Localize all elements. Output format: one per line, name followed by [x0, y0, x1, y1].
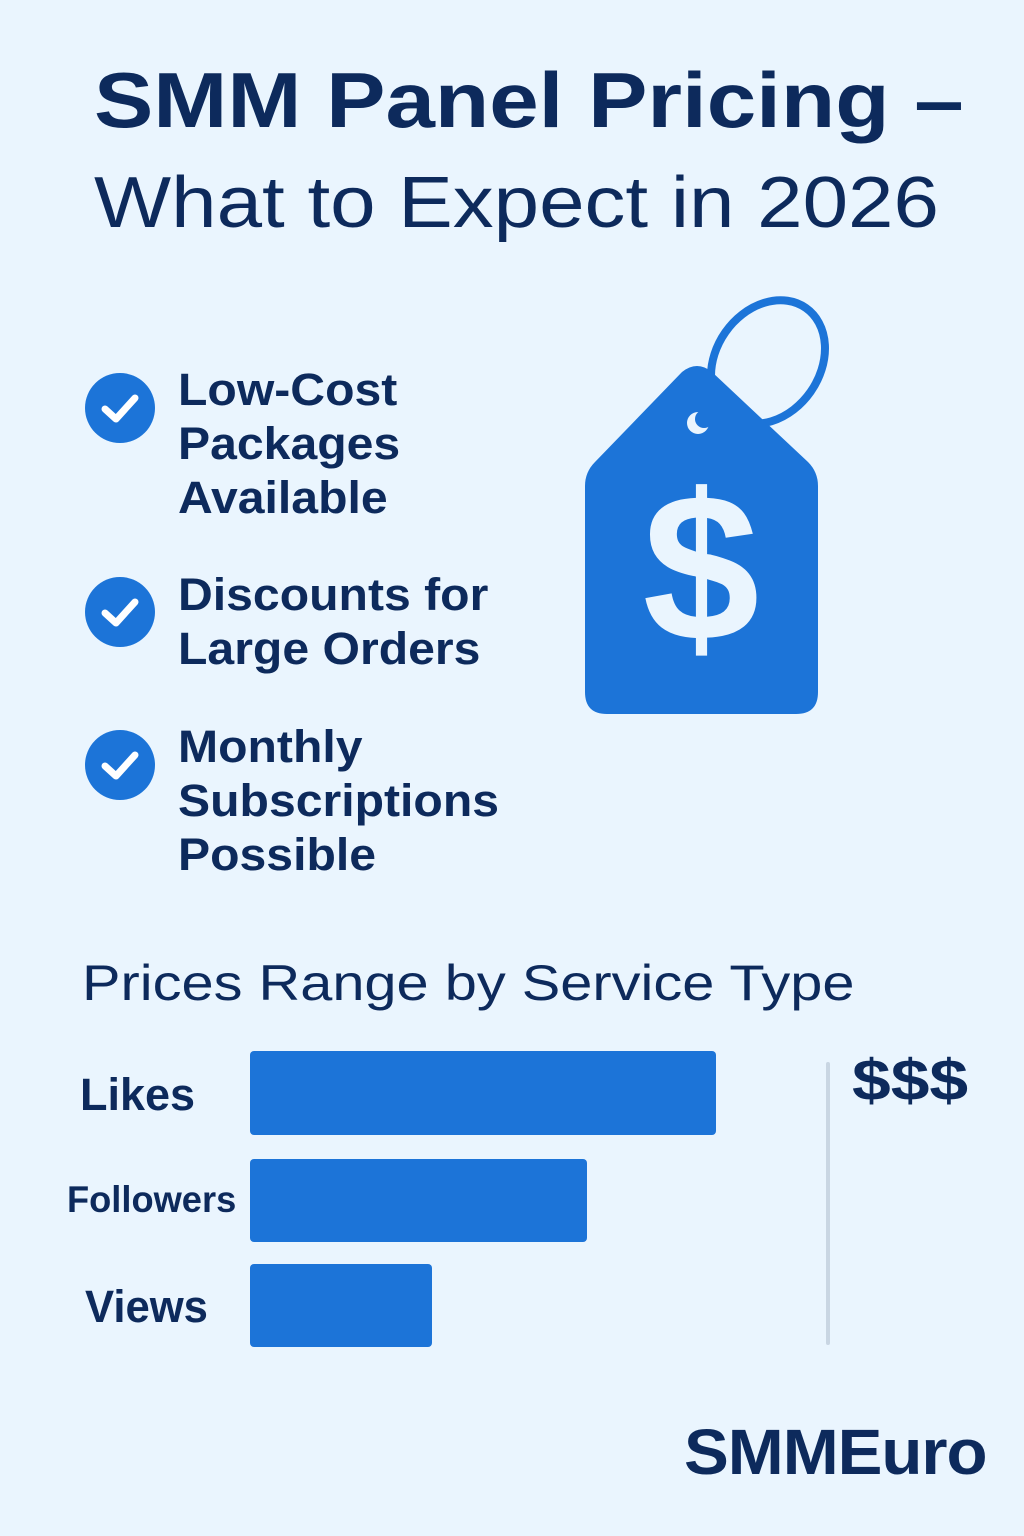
check item 1: Available: [178, 472, 388, 523]
check item 1: Packages: [178, 418, 400, 469]
title: [94, 56, 964, 243]
checklist: [85, 364, 499, 880]
check item 2: Discounts for: [178, 569, 488, 620]
section heading: Prices Range by Service Type: [82, 955, 855, 1011]
label: Views: Views: [85, 1281, 208, 1332]
bar: Views: [250, 1264, 432, 1347]
check item 3: Subscriptions: [178, 775, 499, 826]
bar: Likes: [250, 1051, 716, 1135]
brand: SMMEuro: SMMEuro: [684, 1416, 986, 1488]
check item 3: Possible: [178, 829, 376, 880]
icon: price tag: $: [643, 450, 759, 685]
bar: Followers: [250, 1159, 587, 1242]
title: SMM Panel Pricing –: [94, 56, 964, 144]
axis line: [826, 1062, 830, 1345]
check item 1: Low-Cost: [178, 364, 397, 415]
check item 3: [85, 721, 499, 880]
label: $$$: $$$: [852, 1048, 968, 1113]
check item 3: Monthly: [178, 721, 363, 772]
bar chart: [67, 1048, 968, 1347]
check item 1: [85, 364, 400, 523]
label: Followers: Followers: [67, 1179, 236, 1220]
check item 2: [85, 569, 488, 674]
label: Likes: Likes: [80, 1069, 195, 1120]
icon: price tag: [585, 296, 829, 714]
title: What to Expect in 2026: [94, 163, 939, 243]
check item 2: Large Orders: [178, 623, 480, 674]
